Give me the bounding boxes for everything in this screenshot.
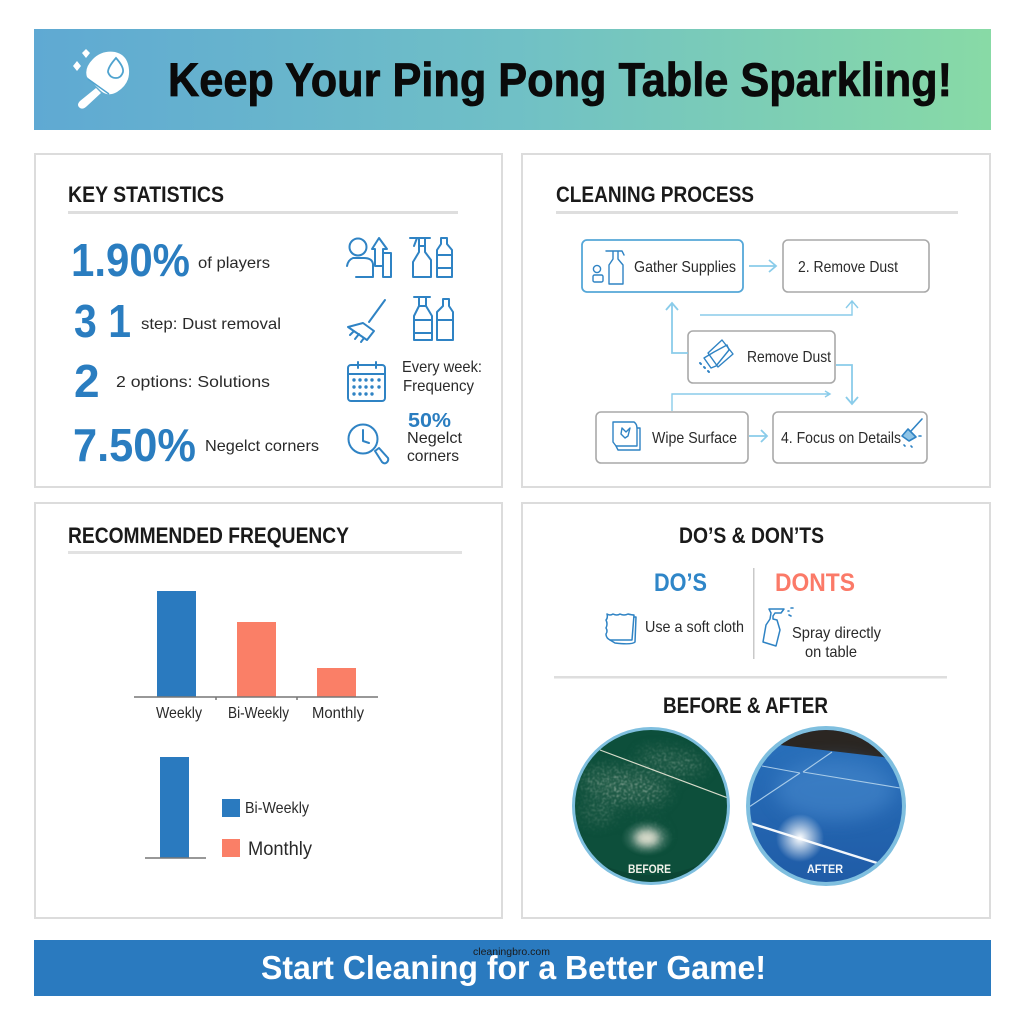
title text: Keep Your Ping Pong Table Sparkling! bbox=[168, 53, 952, 106]
stat: 2 options bbox=[74, 355, 270, 407]
stat: 7.50% neglect corners: 7.50% bbox=[73, 419, 196, 471]
title banner bbox=[34, 29, 991, 130]
callout: every week frequency bbox=[402, 359, 482, 395]
divider between columns bbox=[753, 568, 754, 659]
icon: calendar bbox=[348, 362, 385, 401]
stat: 1.90% of players: of players bbox=[198, 255, 270, 272]
panel: key statistics bbox=[35, 154, 502, 487]
icon: soft cloth bbox=[606, 614, 636, 644]
icon: scrub brush bbox=[902, 419, 922, 447]
panel: do's and don'ts, before and after bbox=[522, 503, 990, 918]
column: do's bbox=[606, 569, 744, 644]
panel: recommended frequency bbox=[35, 503, 502, 918]
bar chart: frequency: Bi-Weekly bbox=[228, 705, 289, 722]
photo: before, dirty green table: BEFORE bbox=[628, 862, 671, 876]
arrow: wipe surface up and across bbox=[672, 391, 830, 411]
bar chart: frequency: Monthly bbox=[312, 705, 364, 722]
stat: 2 options: 2 bbox=[74, 355, 100, 407]
column: don'ts bbox=[763, 569, 881, 661]
heading: before and after: BEFORE & AFTER bbox=[663, 693, 828, 718]
stat: 7.50% neglect corners: Negelct corners bbox=[205, 438, 319, 455]
callout: 50% neglect corners: 50% bbox=[408, 410, 451, 432]
column: don'ts: DONTS bbox=[775, 569, 855, 597]
footer call to action: Start Cleaning for a Better Game! bbox=[261, 949, 766, 986]
column: do's: Use a soft cloth bbox=[645, 619, 744, 636]
step: wipe surface: Wipe Surface bbox=[652, 430, 737, 447]
callout: 50% neglect corners bbox=[407, 410, 463, 465]
callout: every week frequency: Frequency bbox=[403, 378, 474, 395]
step: 4. focus on details: 4. Focus on Details bbox=[781, 430, 901, 447]
heading: recommended frequency: RECOMMENDED FREQUENCY bbox=[68, 523, 349, 548]
arrow: center to focus on details bbox=[836, 365, 858, 404]
arrow: gather to remove dust bbox=[749, 260, 776, 272]
step: 4. focus on details bbox=[773, 412, 927, 463]
legend: Bi-Weekly bbox=[245, 800, 309, 817]
icon: spray bottle bbox=[763, 608, 793, 646]
legend bbox=[222, 799, 312, 860]
step: wipe surface bbox=[596, 412, 748, 463]
stat: 1.90% of players bbox=[71, 234, 270, 286]
column: don'ts: Spray directly bbox=[792, 625, 881, 642]
photo: before, dirty green table bbox=[570, 725, 732, 890]
icon: spray bottles with label bbox=[414, 297, 453, 340]
step: remove dust bbox=[688, 331, 835, 383]
step: 2. remove dust bbox=[783, 240, 929, 292]
stat: 7.50% neglect corners bbox=[73, 419, 319, 471]
step: gather supplies bbox=[582, 240, 743, 292]
arrow: center to gather supplies bbox=[666, 303, 688, 353]
panel: cleaning process bbox=[522, 154, 990, 487]
step: remove dust: Remove Dust bbox=[747, 349, 831, 366]
callout: every week frequency: Every week: bbox=[402, 359, 482, 376]
photo: after, clean blue table: AFTER bbox=[807, 862, 843, 876]
stat: 2 options: 2 options: Solutions bbox=[116, 374, 270, 391]
icon: person with up arrow bbox=[347, 238, 391, 277]
icon: ping pong paddle with water drop bbox=[73, 49, 129, 109]
footer banner bbox=[34, 940, 991, 996]
heading: key statistics: KEY STATISTICS bbox=[68, 182, 224, 207]
bar chart: single bar bbox=[145, 757, 206, 858]
column: do's: DO’S bbox=[654, 569, 707, 597]
stat: 3 1 step bbox=[74, 295, 281, 347]
heading: do's and don'ts: DO’S & DON’TS bbox=[679, 523, 824, 548]
heading: cleaning process: CLEANING PROCESS bbox=[556, 182, 754, 207]
step: 2. remove dust: 2. Remove Dust bbox=[798, 259, 898, 276]
step: gather supplies: Gather Supplies bbox=[634, 259, 736, 276]
arrow: wipe to focus bbox=[749, 430, 767, 442]
bar chart: frequency bbox=[134, 591, 378, 722]
legend: Monthly bbox=[248, 839, 312, 860]
icon: clock with magnifier bbox=[348, 424, 388, 463]
watermark: cleaningbro.com bbox=[473, 947, 550, 958]
stat: 3 1 step: 3 1 bbox=[74, 295, 131, 347]
stat: 1.90% of players: 1.90% bbox=[71, 234, 190, 286]
arrow: connector to 2. remove dust bbox=[700, 301, 858, 315]
callout: 50% neglect corners: Negelct bbox=[407, 430, 463, 447]
bar chart: frequency: Weekly bbox=[156, 705, 202, 722]
icon: broom bbox=[348, 300, 385, 342]
stat: 3 1 step: step: Dust removal bbox=[141, 316, 281, 333]
photo: after, clean blue table bbox=[746, 725, 908, 887]
callout: 50% neglect corners: corners bbox=[407, 448, 459, 465]
icon: spray bottle and bottle bbox=[410, 238, 452, 277]
column: don'ts: on table bbox=[805, 644, 857, 661]
